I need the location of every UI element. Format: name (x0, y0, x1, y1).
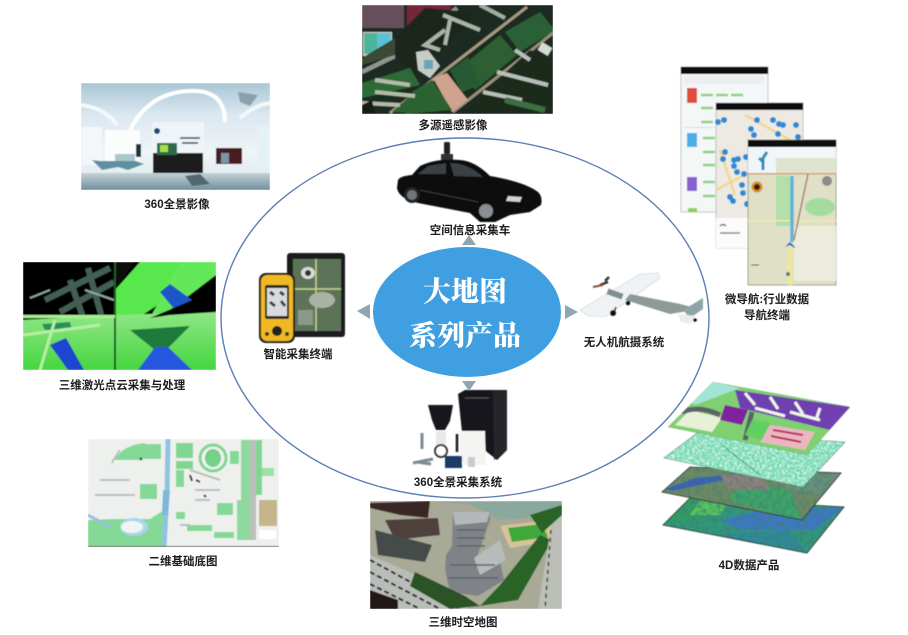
image: navigation phones (681, 67, 836, 285)
icon: UAV aircraft (580, 273, 703, 324)
label: 空间信息采集车: 空间信息采集车 (430, 223, 510, 237)
image: 3D city map (370, 501, 562, 609)
icon: survey vehicle (397, 142, 542, 222)
label: 二维基础底图: 二维基础底图 (148, 554, 218, 568)
phone 3: turn-by-turn map (748, 140, 836, 285)
image: 360 panorama (81, 83, 270, 190)
outer ellipse ring (221, 138, 709, 498)
arrow: right (565, 305, 578, 319)
label: 微导航:行业数据 导航终端: 微导航:行业数据 (725, 292, 810, 306)
layer: satellite image (662, 466, 840, 520)
label: 无人机航摄系统: 无人机航摄系统 (584, 335, 665, 349)
label: 多源遥感影像: 多源遥感影像 (418, 118, 488, 132)
arrow: up (462, 235, 476, 245)
label: 360全景采集系统: 360全景采集系统 (414, 475, 503, 489)
label: 微导航:行业数据 导航终端 (725, 292, 810, 322)
label: 360全景影像: 360全景影像 (144, 197, 210, 211)
image: 4D data layers (660, 382, 850, 555)
label: 智能采集终端: 智能采集终端 (264, 347, 333, 361)
label: 微导航:行业数据 导航终端: 导航终端 (744, 308, 790, 322)
icon: 360 panoramic capture kit (413, 390, 507, 468)
center circle: 大地图系列产品 (373, 247, 561, 377)
label: 三维时空地图: 三维时空地图 (428, 615, 498, 629)
arrow: left (357, 304, 370, 319)
phone 2: POI map (715, 103, 803, 248)
arrow: down (462, 381, 476, 391)
layer: terrain relief (663, 498, 844, 554)
image: 3D laser point cloud panels (23, 262, 216, 370)
phone 1: category list (681, 67, 768, 212)
center circle: 大地图系列产品: 系列产品 (409, 319, 521, 352)
layer: green point map (664, 432, 844, 488)
image: 2D base map (88, 439, 279, 548)
layer: thematic city map (668, 382, 850, 455)
label: 三维激光点云采集与处理: 三维激光点云采集与处理 (59, 378, 186, 392)
center circle: 大地图系列产品: 大地图 (423, 276, 507, 308)
icon: smart handheld terminal and tablet (259, 253, 345, 343)
image: remote sensing aerial photo (362, 5, 553, 114)
label: 4D数据产品: 4D数据产品 (719, 558, 779, 572)
